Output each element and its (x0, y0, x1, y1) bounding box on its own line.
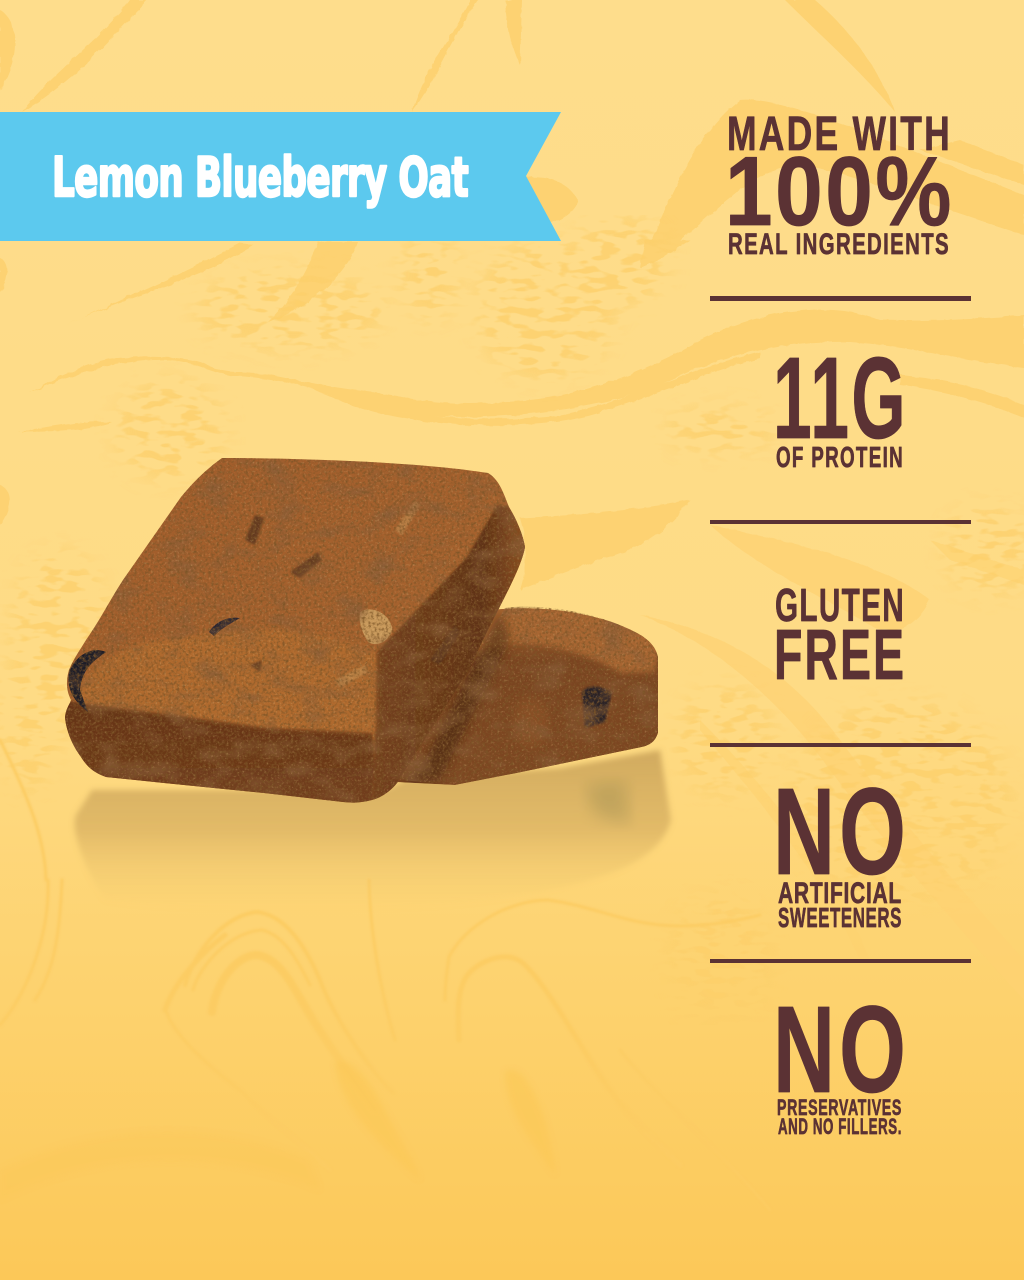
fine swirl lines (0, 740, 770, 1210)
dark flecks (245, 515, 460, 672)
mottled texture (60, 450, 665, 810)
divider (710, 520, 971, 524)
claim: made with 100% real ingredients (725, 108, 954, 261)
ribbon banner (0, 112, 561, 241)
claim: gluten free (774, 579, 906, 695)
claim: made with 100% real ingredients: 100% (725, 136, 954, 246)
highlight streaks (335, 500, 420, 688)
front bar (60, 450, 530, 810)
claim: gluten free: FREE (774, 616, 906, 695)
claim: no artificial sweeteners: NO (773, 764, 910, 901)
claims column (710, 108, 971, 1139)
claim: 11g of protein (773, 333, 908, 474)
claim: no artificial sweeteners: SWEETENERS (778, 902, 902, 933)
back bar (395, 600, 660, 785)
front face (60, 700, 375, 810)
product reflection (75, 750, 671, 911)
divider (710, 296, 971, 301)
blueberry: small top (209, 618, 240, 636)
claim: no artificial sweeteners (773, 764, 910, 933)
claim: 11g of protein: 11G (773, 333, 908, 463)
nut highlight (359, 609, 392, 644)
claim: 11g of protein: OF PROTEIN (776, 442, 904, 474)
divider (710, 743, 971, 747)
product photo: two oat bars (60, 450, 665, 810)
claim: no preservatives and no fillers: PRESERVATIVES (777, 1095, 902, 1120)
claim: no preservatives and no fillers: AND NO FILLERS. (778, 1114, 902, 1139)
blueberry: left edge (68, 650, 106, 712)
claim: no artificial sweeteners: ARTIFICIAL (778, 877, 902, 910)
banner title: Lemon Blueberry Oat (52, 146, 468, 209)
right side face (372, 505, 530, 805)
claim: no preservatives and no fillers: NO (773, 982, 910, 1119)
divider (710, 959, 971, 963)
crumb texture (60, 450, 665, 810)
lighter front rim (81, 630, 376, 733)
grainy swirl clusters (0, 215, 1024, 1025)
crumb highlights (60, 450, 665, 810)
claim: gluten free: GLUTEN (775, 579, 905, 631)
claim: no preservatives and no fillers (773, 982, 910, 1139)
claim: made with 100% real ingredients: MADE WITH (727, 108, 952, 161)
lower soft blobs (0, 1061, 555, 1200)
marbled swirl background pattern (0, 0, 1024, 1000)
